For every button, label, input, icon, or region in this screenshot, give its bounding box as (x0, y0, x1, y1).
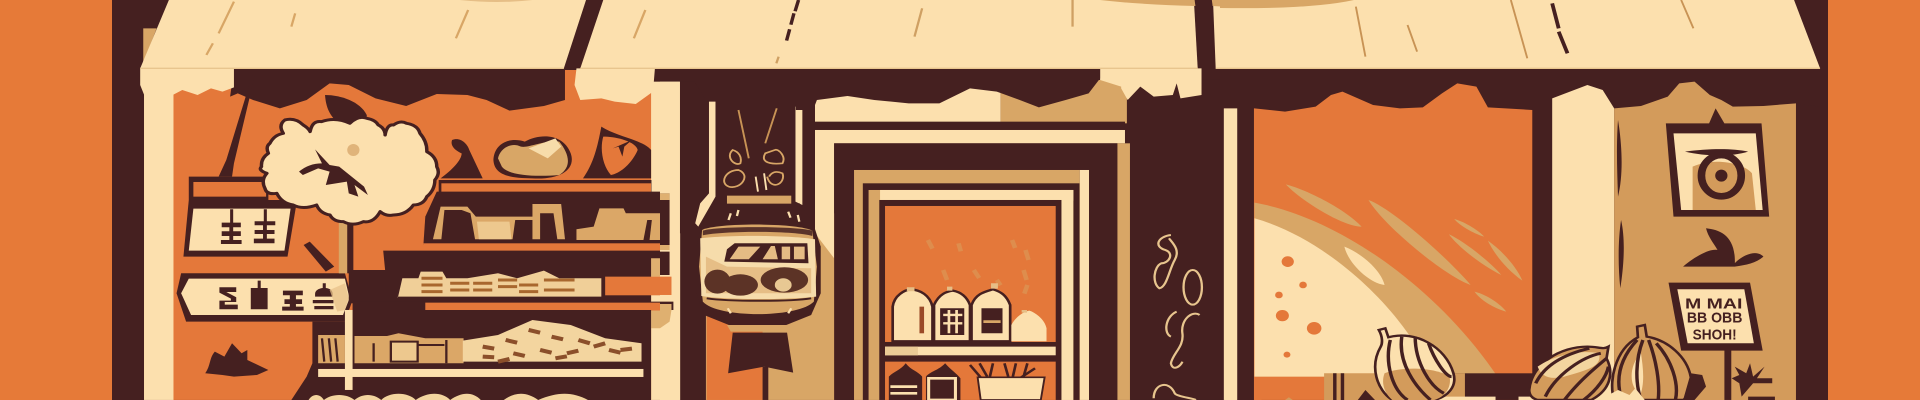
cream highlight on ring (1344, 247, 1385, 285)
upper hanging sign (183, 177, 297, 257)
sky streaks (1286, 184, 1522, 312)
lower jars (889, 363, 960, 400)
dark column above lantern (680, 80, 815, 233)
leaf on tree (325, 95, 367, 125)
sun dots (1275, 256, 1321, 358)
onion two (1529, 347, 1610, 400)
small flower on wall (1732, 363, 1775, 400)
wall scratches (1617, 120, 1624, 288)
panel: centre shop section with door and lantern (660, 0, 1262, 400)
sign text: M MAI (1685, 295, 1742, 312)
hanging pole (219, 75, 255, 177)
tan sun glimpse (1100, 0, 1260, 8)
goods: bottom row (309, 394, 588, 400)
onion three (1612, 325, 1706, 400)
left cream post (144, 80, 174, 400)
left awning scallop (140, 68, 234, 99)
shelf end overlap (660, 193, 673, 328)
potted plant (970, 363, 1045, 400)
dark valance (660, 68, 1100, 110)
goods: grain heap (463, 320, 642, 362)
right awning scallop with orange tab (565, 68, 655, 104)
goods: loaves (398, 271, 601, 298)
sign text: BB OBB (1687, 310, 1742, 326)
tan valance stub on scallop (1100, 68, 1202, 100)
awning panel three (1213, 0, 1260, 68)
cream strips by lantern (695, 102, 802, 227)
shelf item: dark cone (441, 139, 483, 178)
crate left (1285, 373, 1595, 400)
top right dark corner (1796, 0, 1820, 33)
thin cream strip beside pillar (1225, 102, 1237, 400)
thin cream strip (1224, 102, 1237, 400)
goods: jars row (318, 333, 464, 363)
pillar flourish (1154, 235, 1202, 400)
faint window pattern (928, 240, 1029, 294)
shelf item: potato (493, 136, 572, 178)
shelf in door (885, 347, 1056, 355)
awning panel two (660, 0, 1198, 68)
strip of orange window edge (1254, 107, 1262, 400)
tan sliver beside awning (143, 28, 157, 63)
lantern (696, 196, 821, 325)
lantern strings and curls (724, 108, 784, 192)
small price sign (1669, 283, 1763, 351)
onion one (1375, 328, 1454, 400)
cream post (1552, 85, 1614, 400)
backdrop above door (813, 80, 1127, 130)
lower hanging sign (177, 273, 353, 322)
door window orange (885, 206, 1056, 342)
awning panel two (580, 0, 700, 68)
door frame (834, 143, 1117, 400)
orange shop wall (173, 83, 652, 400)
tan ring of sun (1254, 203, 1497, 377)
shelf item: dark bird (583, 127, 651, 178)
orange window (1254, 80, 1532, 400)
sign post (1724, 350, 1731, 400)
cream post end (660, 82, 680, 400)
jars on shelf (893, 283, 1047, 341)
tree trunk (304, 217, 353, 273)
framed target sign (1666, 108, 1769, 217)
lantern tassel and pole (727, 325, 793, 400)
goods: boxes (576, 208, 664, 240)
awning panel three (1220, 0, 1820, 68)
awning creases (776, 0, 1073, 63)
wall beside door (706, 130, 1131, 400)
tan wall panel (1614, 82, 1796, 400)
awning panel one (140, 0, 586, 68)
cream sun (1254, 218, 1427, 377)
cream bag peak (1599, 388, 1645, 400)
panel: left shop section (140, 0, 700, 400)
right cream post (651, 82, 680, 400)
awning creases (1356, 0, 1693, 58)
cream flower tree (260, 117, 438, 224)
lower door window (885, 362, 1056, 400)
sign text (1685, 295, 1742, 343)
panel: right shop section with window and onions (1220, 0, 1820, 400)
sun glimpse top (1220, 0, 1354, 8)
small plant (205, 343, 268, 377)
dark valance (230, 68, 565, 111)
dark crate gap (1453, 373, 1534, 400)
leaf ornament (1683, 228, 1763, 267)
dark valance (1220, 68, 1820, 112)
shelves unit (291, 180, 673, 400)
sign text: SHOH! (1693, 326, 1737, 343)
goods: books (433, 204, 565, 239)
dark pillar (1130, 80, 1225, 400)
